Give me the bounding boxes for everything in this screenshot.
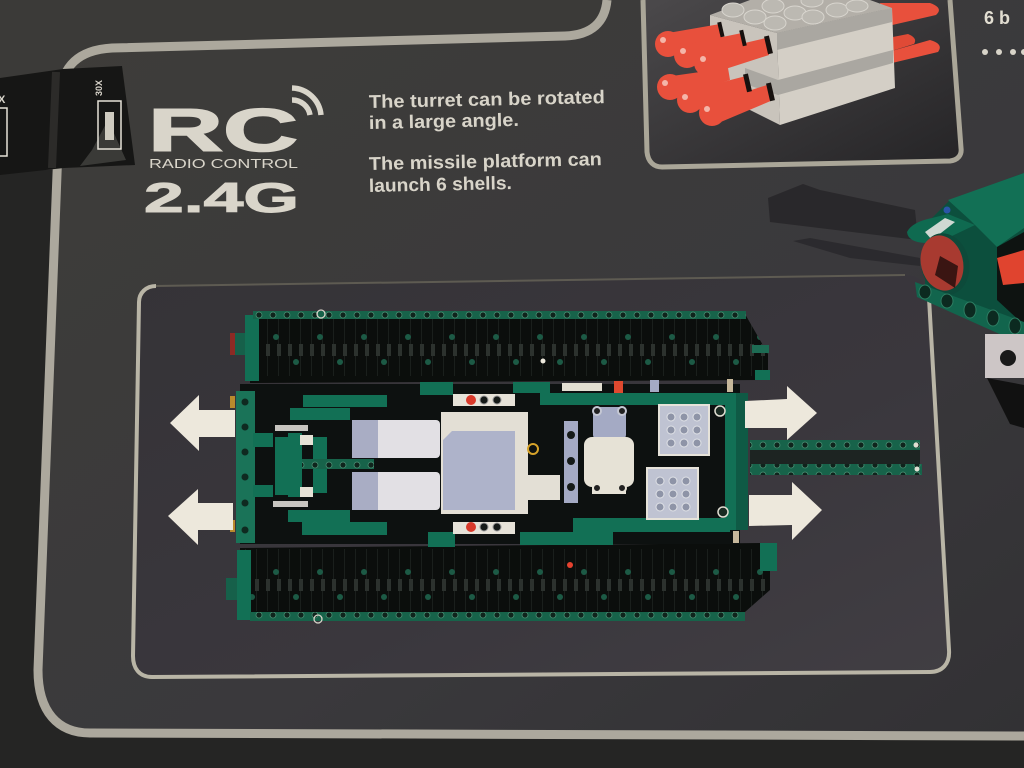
text block: feature description: in a large angle. <box>369 109 519 133</box>
twin barrels <box>750 440 922 475</box>
front bumper <box>230 391 255 543</box>
text block: feature description: The missile platform can <box>369 148 602 174</box>
illustration: tank top view <box>226 310 922 623</box>
arrow: rear lower right <box>749 482 822 540</box>
text block: feature description: launch 6 shells. <box>369 172 512 196</box>
text block: feature description: The turret can be rotated <box>369 86 605 112</box>
icon: wireless signal arcs <box>292 88 321 115</box>
square plates with studs <box>659 405 709 455</box>
servo motor <box>564 421 578 503</box>
shadow of tank turret <box>768 184 920 266</box>
text: 6 bullet caption, cropped <box>982 8 1024 55</box>
black tape patch with box markings <box>0 66 135 175</box>
panel: missile platform inset <box>643 0 961 167</box>
arrow: front lower left <box>168 489 233 545</box>
lower track <box>226 543 777 623</box>
chassis body <box>230 380 748 547</box>
dotted rule <box>982 49 1024 55</box>
motors <box>352 420 440 458</box>
battery box <box>441 412 528 514</box>
illustration: tank turret front, cropped <box>907 173 1024 428</box>
illustration: brick block with missiles <box>655 0 940 126</box>
RC lettering: RC <box>148 97 298 164</box>
text: 6 bullet caption, cropped: 6 b <box>984 8 1010 28</box>
panel: top-view inset <box>133 275 949 677</box>
2.4G lettering: 2.4G <box>144 174 299 221</box>
top connector <box>562 383 602 391</box>
text block: feature description <box>369 86 605 196</box>
radio control caption: RADIO CONTROL <box>149 156 298 171</box>
arrow: front upper left <box>170 395 235 451</box>
axle pins <box>727 379 739 543</box>
upper track <box>230 310 770 383</box>
black tape patch with box markings: 30X <box>94 80 104 96</box>
arrow: rear upper right <box>745 386 817 440</box>
logo: RC radio control 2.4G <box>144 88 321 221</box>
